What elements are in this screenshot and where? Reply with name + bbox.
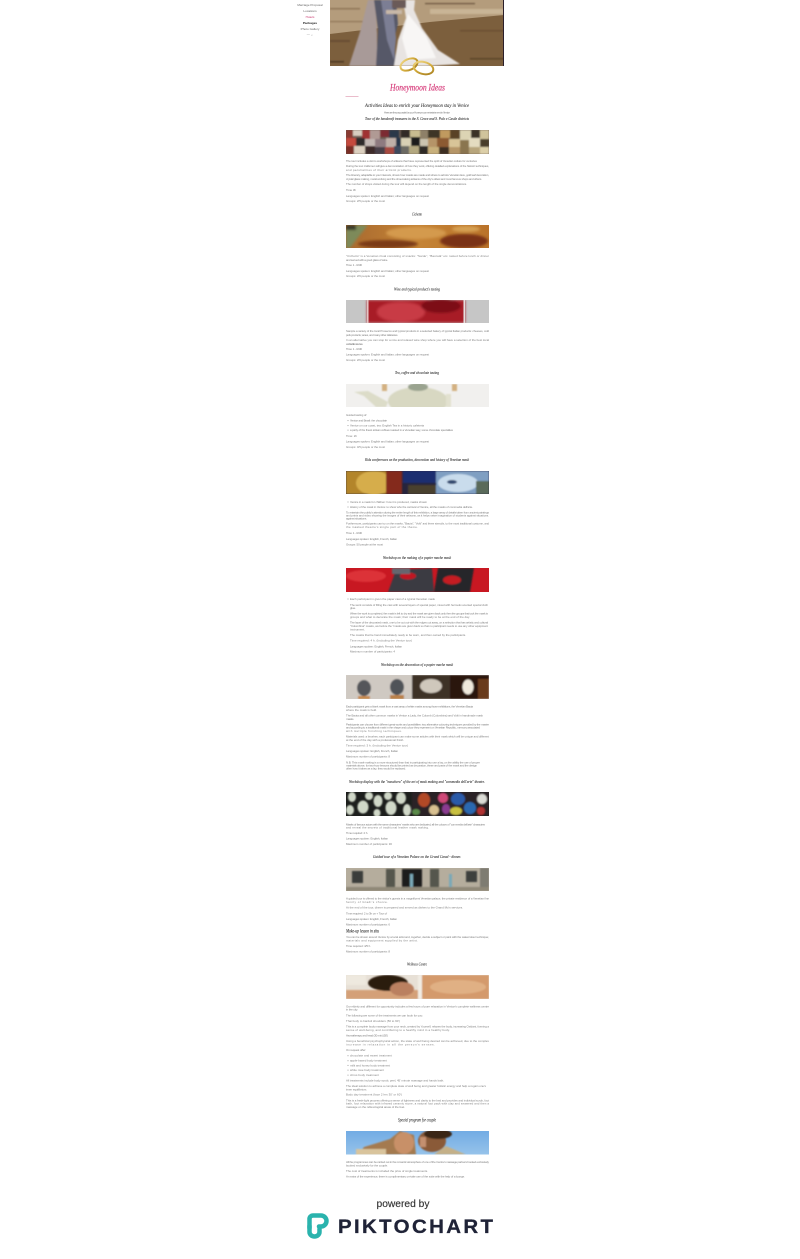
text block: mask making: Languages spoken: English, French, Italian xyxy=(350,644,402,648)
text block: palace tour: A guided tour is offered to the visitor's guests in a magnificent Venetian palace, the private residence of a Venetian fine xyxy=(346,897,489,901)
section heading: kids conference: Kids conferences on the production, decoration and history of Venetian mask xyxy=(364,457,470,463)
text block: wellness centre: bath, foot relaxation with infrared ceramic stone, a natural foot pack with clay and seaweed and then a xyxy=(346,1102,489,1106)
text block: special program: booked exclusively for the couple. xyxy=(346,1163,388,1167)
navigation menu xyxy=(297,3,323,37)
text block: tea tasting: Venice and Brazil: the chocolate xyxy=(350,418,387,422)
text block: handcraft tour xyxy=(346,159,489,203)
text block: special program: All the programmes can be carried out in the romantic atmosphere of one of the Centre's massage parlours booked exclusively xyxy=(346,1160,490,1164)
text block: mask making: The layer of the decorated mask, one to be cut out with the edges cut away, on a selection that has artistic and cultural xyxy=(350,621,488,625)
text block: wine tasting: Time: 1 - 1h30 xyxy=(346,347,362,351)
text block: tea tasting: Time: 2h xyxy=(346,434,357,438)
text block: kids conference: Venice in a mask for children: how it is produced, masks shown xyxy=(350,500,427,504)
text block: decoration workshop: at the end of the day with a professional finish. xyxy=(346,738,404,742)
text block: mask making: Time required: 4 h. (Including the Venice tour) xyxy=(350,639,412,643)
photo: white teapot xyxy=(346,384,489,407)
section heading: palace tour: Guided tour of a Venetian Palace on the Grand Canal - dinner. xyxy=(373,854,461,859)
text block: display workshop: Maximum number of participants: 30 xyxy=(346,842,392,846)
intro heading: Tour of the handcraft treasures in the S. Croce and S. Polo e Castle districts xyxy=(365,116,469,121)
text block: handcraft tour: and peculiarities of their artistic products. xyxy=(346,168,412,172)
photo: glass of red wine xyxy=(346,300,489,323)
text block: make-up lesson: You can be shown around Venice by a local artist and, together, decide a subject or paint with the watercolour technique; xyxy=(346,935,489,939)
photo: venetian masks xyxy=(346,130,489,154)
text block: decoration workshop: and according to a traditional mask in the shape and colour they represent on Venetian Republic, memory associated xyxy=(346,726,480,730)
text block: kids conference xyxy=(346,500,490,547)
photo: massage at the spa xyxy=(346,975,489,999)
text block: tea tasting: Languages spoken: English and Italian; other languages on request xyxy=(346,440,429,444)
text block: cichetto: Time: 1 - 1h30 xyxy=(346,263,362,267)
text block: make-up lesson: Maximum number of participants: 8 xyxy=(346,950,390,954)
text block: mask making: "Colombina" masks, we before the "masks are given back so that no participant needs to use any other equipment xyxy=(350,624,488,628)
text block: wellness centre: All treatments include body scrub, peel, 45' minute massage and hands bath. xyxy=(346,1079,444,1083)
navigation menu: — ⌄ xyxy=(307,33,313,37)
text block: kids conference: Languages spoken: English, French, Italian xyxy=(346,537,397,541)
text block: kids conference: the masked theatre's single part of the theme. xyxy=(346,525,418,529)
text block: wine tasting: Languages spoken: English and Italian; other languages on request xyxy=(346,352,429,356)
text block: decoration workshop: Time required: 3 h. (Including the Venice tour) xyxy=(346,744,408,748)
text block: special program: The cost of treatments is included the price of single treatments. xyxy=(346,1169,428,1173)
text block: wine tasting: and traditional wines. xyxy=(346,342,363,346)
text block: wellness centre: Our elderly and different for opportunity includes a few hours of pure relaxation in Venice's complete wellness centre xyxy=(346,1004,489,1008)
text block: wine tasting: Groups: 2/6 people or the most xyxy=(346,358,385,362)
text block: palace tour: family of Gradi's choice. xyxy=(346,900,388,904)
text block: mask making: When the work is completed, the mask is left to dry and the mask are given back only then the groups that took the mask is xyxy=(350,612,489,616)
text block: display workshop: and reveal the secrets of traditional leather mask making. xyxy=(346,825,429,829)
text block: mask making: glue. xyxy=(350,606,356,610)
accent divider xyxy=(346,95,358,98)
text block: palace tour: At the end of the tour, dinner is prepared and served as dishes to the Grand Mo's services. xyxy=(346,906,463,910)
section heading: decoration workshop: Workshop on the decoration of a papier mache mask xyxy=(381,662,454,667)
photo: cichetto food xyxy=(346,225,489,248)
text block: wellness centre: citrus body treatment xyxy=(350,1073,379,1077)
photo: red and black masks xyxy=(346,568,489,592)
text block: wellness centre: The ideal solution to achieve a complete state of well being and greater holistic energy and help a regain one's xyxy=(346,1084,487,1088)
text block: wellness centre: chocolate and sweet treatment xyxy=(350,1054,392,1058)
text block: decoration workshop: where the mask is held. xyxy=(346,708,377,712)
text block: wellness centre: apple-based body treatment xyxy=(350,1059,387,1063)
text block: cichetto: and served with a good glass of wine. xyxy=(346,258,388,262)
text block: kids conference: To entertain the public's attention during the entire length of this exhibition, a large array of details taken from ancient paintings xyxy=(346,511,490,515)
text block: decoration workshop: with multiple finishing techniques. xyxy=(346,729,402,733)
text block: decoration workshop: masks. xyxy=(346,717,354,721)
text block: palace tour: Maximum number of participants: 6 xyxy=(346,923,390,927)
hero photo: wedding couple on the beach xyxy=(330,0,504,66)
text block: wellness centre: Using a beneficial psychophysical action, the state of well being desired can be achieved, due to the complex xyxy=(346,1039,490,1043)
intro heading: Activities Ideas to enrich your Honeymoon stay in Venice xyxy=(364,103,470,109)
text block: display workshop xyxy=(346,822,486,846)
text block: cichetto: Groups: 2/6 people or the most xyxy=(346,274,385,278)
text block: tea tasting: Guided tasting of: xyxy=(346,413,367,417)
intro heading: Here are the proposals for your Honeymoon entertainment in Venice xyxy=(384,111,450,115)
text block: decoration workshop: materials above, for two-hour lessons should be printed as decoration, these and parts of the mask and the design xyxy=(346,764,477,768)
text block: handcraft tour: Groups: 2/5 people or the most xyxy=(346,199,385,203)
navigation menu: Photo Gallery xyxy=(301,27,320,31)
text block: tea tasting: Groups: 4/5 people or the most xyxy=(346,445,385,449)
text block: kids conference: History of the mask in Venice: to show who the carnival of Venice, all the masks of commedia dell'arte. xyxy=(350,505,473,509)
text block: wellness centre: in the city. xyxy=(346,1008,358,1012)
text block: tea tasting: Venice on our coast, tea: English Tea in a historic cafeteria xyxy=(350,424,424,428)
text block: wellness centre: Aromatherapy and head (30 min) (50') xyxy=(346,1034,388,1038)
text block: wellness centre: This is a fresh-light process offering a sense of lightness and clarity to the bed and provides and individual scrub, foot xyxy=(346,1098,489,1102)
text block: handcraft tour: Time 3h xyxy=(346,188,356,192)
text block: wellness centre: white rose body treatment xyxy=(350,1068,384,1072)
title: Honeymoon Ideas xyxy=(389,84,445,94)
text block: cichetto: Languages spoken: English and Italian; other languages on request xyxy=(346,269,429,273)
text block: wellness centre: The following are some of the treatments we can book for you: xyxy=(346,1013,423,1017)
text block: wellness centre: This is a complete body massage from your neck, created by Yourself, relaxes the body, increasing Oxidant, forming a xyxy=(346,1025,489,1029)
text block: wellness centre: sense of well-being, and contributing to a healthy mind in a healthy body. xyxy=(346,1028,450,1032)
text block: wine tasting: Sample a variety of the local Prosecco and typical products in a selected bakery of typical Italian products: cheeses, cold xyxy=(346,329,489,333)
navigation menu: Packages xyxy=(303,21,317,25)
navigation menu: Locations xyxy=(303,9,317,13)
icon: gold wedding rings xyxy=(399,56,435,76)
section heading: tea tasting: Tea, coffee and chocolate tasting xyxy=(395,370,440,376)
text block: decoration workshop: Each participant gets a blank mask from a vast array of white masks among those exhibitions, the Venetian Bauta xyxy=(346,705,473,709)
section heading: wellness centre: Wellness Centre xyxy=(407,962,427,967)
text block: display workshop: Masks of famous actors with the same characters' masks who are dedicated, all the colours of "commedia dell'arte" characters xyxy=(346,822,486,826)
text block: handcraft tour: crystal glass making, metal working and the shoemaking artisans of the city's oldest and most famous shops and others. xyxy=(346,177,482,181)
text block: wellness centre: Thai body to bardoli shoulders (50 to 90') xyxy=(346,1019,400,1023)
text block: make-up lesson xyxy=(346,935,489,954)
subheading: make-up lesson: Make-up lesson in situ xyxy=(345,929,379,935)
text block: mask making: The masks that be hand immediately ready to be worn, and then owned by the participants. xyxy=(350,633,466,637)
text block: make-up lesson: materials and equipment supplied by the artist. xyxy=(346,938,418,942)
text block: mask making: instrument. xyxy=(350,627,365,631)
text block: wellness centre xyxy=(346,1004,490,1109)
section heading: Cichetto: Cichetto xyxy=(412,212,422,216)
text block: mask making: groups and what to decorate the mask; their mask will be ready to be at the end of the day. xyxy=(350,615,470,619)
text block: kids conference: Groups: 50 people at the most xyxy=(346,543,383,547)
text block: mask making: Each participant in given the paper cast of a typical Venetian mask xyxy=(350,597,436,601)
text block: wellness centre: inner equilibrium. xyxy=(346,1087,367,1091)
photo: gold and blue masks xyxy=(346,471,489,494)
text block: special program xyxy=(346,1160,490,1179)
navigation menu: Marriage Proposal xyxy=(297,3,323,7)
text block: wellness centre: Body day treatment (face 2 hrs 30' or 60') xyxy=(346,1093,402,1097)
text block: handcraft tour: The tour includes a visit to workshops of artisans that have represented the spirit of Venetian culture for centuries xyxy=(346,159,478,163)
text block: decoration workshop xyxy=(346,705,489,771)
text block: handcraft tour: Languages spoken: English and Italian; other languages on request xyxy=(346,194,429,198)
text block: decoration workshop: often how it takes as a lay, they would be replaced. xyxy=(346,767,406,771)
text block: kids conference: and prints and video showing the images of their artisans, as it helps seize imagination of students against situations. xyxy=(346,513,489,517)
text block: tea tasting xyxy=(346,413,454,449)
text block: wellness centre: increase in relaxation in all the person's senses. xyxy=(346,1042,435,1046)
text block: handcraft tour: During the tour craftsmen will give a demonstration of how they work, offering detailed explanations of the historic techniques, xyxy=(346,164,489,168)
text block: wellness centre: On request offer: xyxy=(346,1048,366,1052)
text block: wellness centre: massage on the reflexological areas of the feet. xyxy=(346,1105,405,1109)
footer: powered by: powered by xyxy=(376,1198,430,1210)
text block: make-up lesson: Time required: 4/5 h. xyxy=(346,944,371,948)
text block: mask making: The work consists of filling the cast with several layers of special paper, mixed with hermetic-scented special cloth xyxy=(350,603,488,607)
text block: wellness centre: milk and honey body treatment xyxy=(350,1063,390,1067)
text block: special program: An extra of the experience, there is complimentary on-take use of the suite with the help of a lounge. xyxy=(346,1175,465,1179)
text block: decoration workshop: Maximum number of participants: 8 xyxy=(346,755,390,759)
text block: display workshop: Languages spoken: English, Italian xyxy=(346,837,388,841)
photo: couple face to face xyxy=(346,1131,489,1154)
text block: handcraft tour: The number of shops visited during the tour will depend on the length of the single demonstrations. xyxy=(346,182,467,186)
section heading: making a mask workshop: Workshop on the making of a papier mache mask xyxy=(383,555,452,560)
text block: kids conference: against situations. xyxy=(346,516,367,520)
text block: cichetto: "Cichetto" is a Venetian ritual consisting of snacks: "Sarde", "Baccalà" etc. tasted before lunch or dinner xyxy=(346,254,489,258)
section heading: wine tasting: Wine and typical product's tasting xyxy=(394,286,441,292)
text block: palace tour xyxy=(346,897,489,927)
text block: decoration workshop: Languages spoken: English, French, Italian xyxy=(346,749,398,753)
intro heading xyxy=(364,103,470,121)
photo: palace on the Grand Canal xyxy=(346,868,489,891)
section heading: display workshop: Workshop display with the "maschera" of the art of mask making and "commedia dell'arte" theatre. xyxy=(349,779,485,784)
text block: palace tour: Time required: 2 to 3h on + Tour of xyxy=(346,911,387,915)
text block: mask making: Maximum number of participants: 4 xyxy=(350,650,395,654)
text block: kids conference: Furthermore, participants can try on the masks, "Bauta", "Volti" and three stencils, to the most traditional costume, and xyxy=(346,522,489,526)
text block: decoration workshop: N.B. This mask-making is a more structured than that in participating into use a lay, on the ability the use of proper xyxy=(346,760,480,764)
text block: display workshop: Time required: 2 h. xyxy=(346,831,368,835)
text block: wine tasting: pork products, wines, and many other delicacies. xyxy=(346,333,398,337)
photo: white and colourful masks xyxy=(346,792,489,816)
text block: decoration workshop: Materials used: a brushes; each participant can make some articles with their mask which will be unique and different xyxy=(346,735,489,739)
text block: kids conference: Time: 1 - 1h30 xyxy=(346,531,362,535)
text block: palace tour: Languages spoken: English, French, Italian xyxy=(346,917,397,921)
text block: handcraft tour: The itinerary, adaptable to your interests, shows how masks are made and where to admire Venetian lace, gold leaf decoration, xyxy=(346,173,489,177)
text block: mask making xyxy=(348,597,489,654)
text block: wine tasting xyxy=(346,329,489,362)
icon: Piktochart logo mark xyxy=(310,1216,327,1236)
navigation menu: Hotels xyxy=(306,15,315,19)
footer: Piktochart wordmark: PIKTOCHART xyxy=(338,1216,493,1238)
text block: decoration workshop: Participants can choose from different great works and possibilities: two alternative colouring techniques provided by the master xyxy=(346,722,489,726)
text block: tea tasting: a party of the finest artisan coffees roasted in a Venetian way, some chocolate specialties xyxy=(350,428,454,432)
photo: white and dark masks xyxy=(346,675,489,699)
text block: cichetto xyxy=(346,254,489,278)
text block: wine tasting: In an alternative you can stop for a nice and relaxed wine shop where you will have a selection of the best local xyxy=(346,338,489,342)
section heading: special program: Special program for couple xyxy=(398,1119,437,1124)
text block: decoration workshop: The Bauta and all other common masks in Venice a Lady, the Colomb (Colombina) and Volti in handmade mask xyxy=(346,713,484,717)
